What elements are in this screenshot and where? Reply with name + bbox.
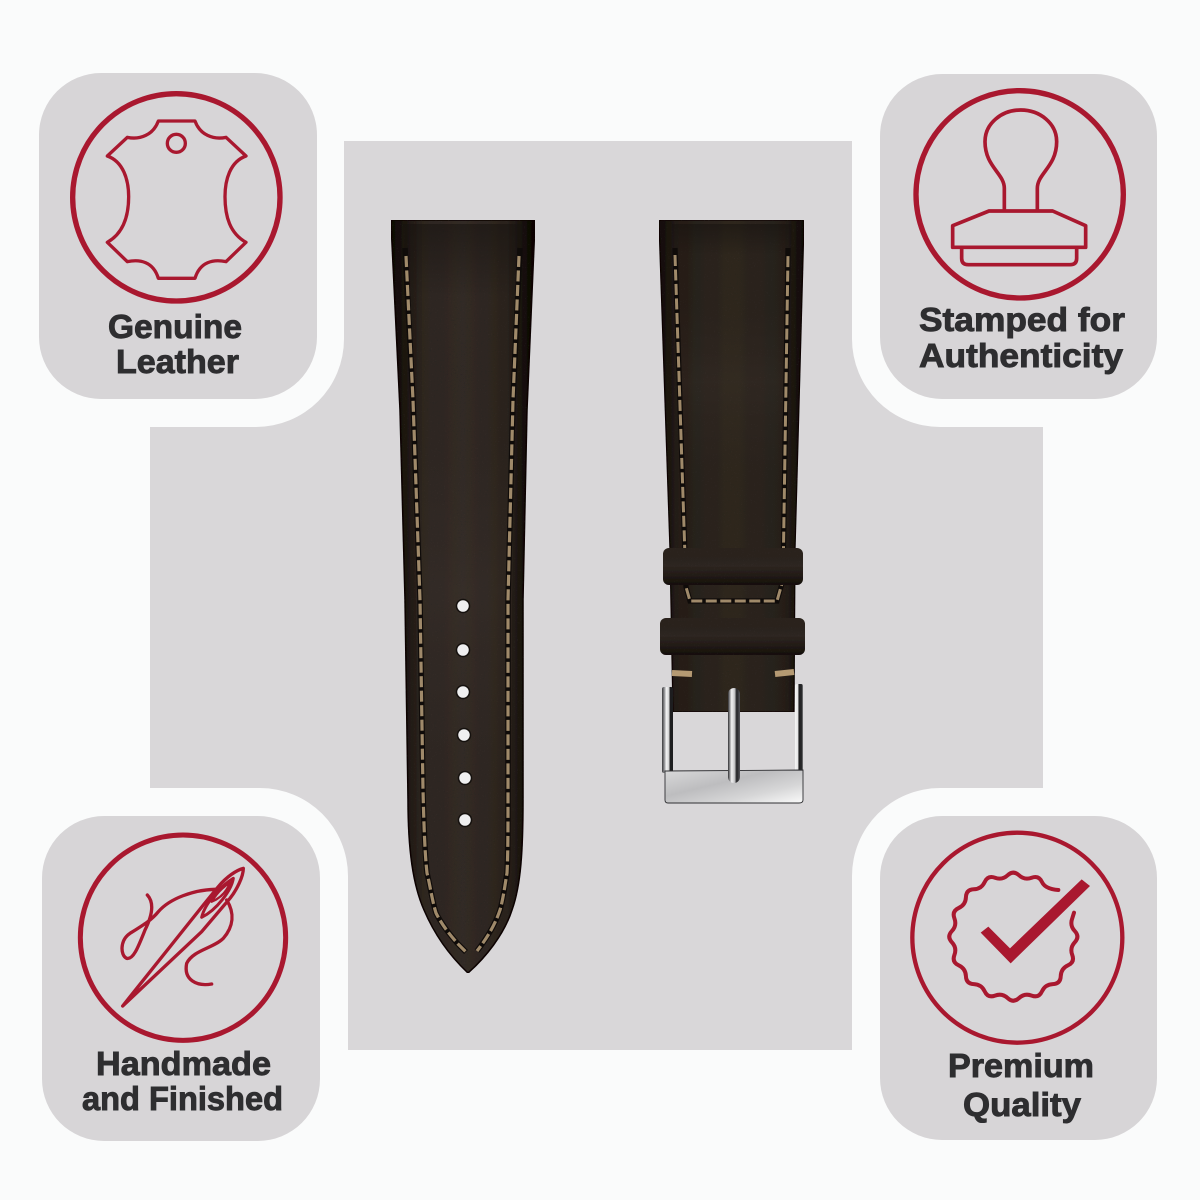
buckle pin	[728, 688, 740, 783]
label: and Finished	[82, 1080, 283, 1117]
strap body	[391, 220, 535, 973]
card background	[880, 816, 1157, 1140]
buckle left post	[662, 687, 673, 773]
label	[108, 308, 242, 380]
buckle holes	[456, 600, 472, 826]
icon: rosette checkmark in circle	[912, 833, 1122, 1043]
icon: stamp in circle	[916, 91, 1123, 298]
panel: handmade and finished	[42, 816, 320, 1141]
card background	[39, 73, 317, 399]
buckle bottom bar	[665, 770, 803, 803]
icon: needle and thread in circle	[80, 835, 286, 1040]
panel: stamped for authenticity	[880, 74, 1157, 399]
label	[82, 1045, 283, 1117]
label: Authenticity	[919, 337, 1124, 374]
strap keeper loop upper	[663, 548, 803, 585]
metal buckle	[662, 684, 803, 803]
strap sheen	[403, 224, 523, 958]
card background	[880, 74, 1157, 399]
card background	[42, 816, 320, 1141]
strap keeper loop lower	[660, 618, 805, 655]
label: Handmade	[96, 1045, 271, 1082]
short strap body	[659, 220, 804, 712]
icon: leather hide in circle	[73, 94, 280, 301]
label: Premium	[948, 1047, 1094, 1084]
label: Quality	[963, 1086, 1082, 1123]
short leather strap piece with loops and buckle	[659, 220, 805, 803]
central gray backdrop panel	[150, 141, 1043, 1050]
label	[948, 1047, 1094, 1123]
panel: premium quality	[880, 816, 1157, 1140]
panel: genuine leather	[39, 73, 317, 399]
short strap sheen	[672, 224, 792, 540]
label: Genuine	[108, 308, 242, 345]
long leather strap piece with buckle holes	[391, 220, 535, 973]
label: Leather	[116, 343, 239, 380]
left and right stitching	[405, 248, 520, 952]
short strap stitching	[672, 248, 794, 674]
buckle right post	[795, 684, 803, 773]
label	[919, 301, 1125, 374]
label: Stamped for	[919, 301, 1125, 338]
